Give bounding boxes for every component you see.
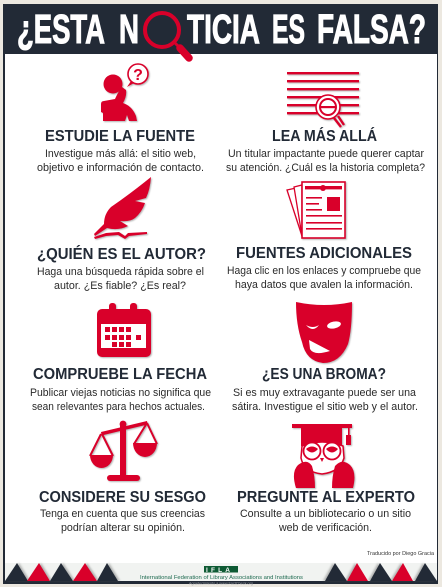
heading: PREGUNTE AL EXPERTO bbox=[237, 489, 415, 506]
title: ES bbox=[272, 6, 305, 52]
panel: pregunte al experto bbox=[237, 424, 415, 534]
body text: web de verificación. bbox=[278, 522, 372, 534]
body text: podrían alterar su opinión. bbox=[61, 522, 185, 534]
title: N bbox=[119, 6, 139, 52]
IFLA logo bbox=[204, 566, 238, 574]
heading: ESTUDIE LA FUENTE bbox=[45, 128, 195, 145]
body text bbox=[240, 508, 411, 534]
organisation name: International Federation of Library Associations and Institutions bbox=[140, 575, 303, 581]
body text: sean relevantes para hechos actuales. bbox=[32, 401, 205, 413]
body text: Si es muy extravagante puede ser una bbox=[233, 387, 417, 399]
icon: calendar bbox=[97, 303, 151, 357]
footer band bbox=[5, 563, 437, 581]
left triangles bbox=[5, 563, 118, 581]
translator credit: Traducido por Diego Gracia bbox=[367, 551, 435, 557]
icon: newspaper pages bbox=[287, 182, 345, 238]
body text bbox=[37, 148, 204, 174]
body text: Publicar viejas noticias no significa que bbox=[30, 387, 211, 399]
icon: balance scales bbox=[90, 421, 157, 481]
panel: compruebe la fecha bbox=[30, 303, 211, 413]
body text: Haga una búsqueda rápida sobre el bbox=[37, 266, 204, 278]
body text bbox=[40, 508, 205, 534]
panel: fuentes adicionales bbox=[227, 182, 421, 291]
body text: Un titular impactante puede querer captar bbox=[228, 148, 424, 160]
title: ¿ESTA bbox=[17, 6, 105, 52]
title: TICIA bbox=[187, 6, 260, 52]
body text bbox=[226, 148, 425, 174]
icon: winking mask bbox=[296, 302, 352, 363]
icon: lines with magnifier bbox=[287, 72, 359, 127]
icon: title magnifier bbox=[145, 13, 189, 58]
body text bbox=[30, 387, 211, 413]
panel: lea más allá bbox=[226, 72, 425, 174]
body text: autor. ¿Es fiable? ¿Es real? bbox=[54, 280, 186, 292]
body text: su atención. ¿Cuál es la historia completa? bbox=[226, 162, 425, 174]
IFLA logo: IFLA bbox=[206, 567, 230, 574]
icon: person with question: ? bbox=[133, 67, 143, 84]
body text: objetivo e información de contacto. bbox=[37, 162, 204, 174]
footer small acknowledgement: Agradecimiento a www.FactCheck.org bbox=[189, 580, 253, 586]
icon: person with question bbox=[101, 64, 148, 121]
panel: quién es el autor bbox=[37, 177, 206, 292]
right triangles bbox=[325, 563, 437, 581]
icon: owl with graduation cap bbox=[292, 424, 354, 488]
body text bbox=[232, 387, 418, 413]
body text bbox=[227, 265, 421, 291]
icon: quill bbox=[94, 177, 151, 239]
heading: LEA MÁS ALLÁ bbox=[272, 126, 377, 145]
heading: COMPRUEBE LA FECHA bbox=[33, 366, 207, 383]
panel: estudie la fuente bbox=[37, 64, 204, 174]
body text: Investigue más allá: el sitio web, bbox=[45, 148, 196, 160]
body text bbox=[37, 266, 204, 292]
body text: Consulte a un bibliotecario o un sitio bbox=[240, 508, 411, 520]
body text: Haga clic en los enlaces y compruebe que bbox=[227, 265, 421, 277]
body text: Tenga en cuenta que sus creencias bbox=[40, 508, 205, 520]
heading: FUENTES ADICIONALES bbox=[236, 245, 412, 262]
heading: ¿QUIÉN ES EL AUTOR? bbox=[37, 244, 206, 263]
heading: ¿ES UNA BROMA? bbox=[262, 366, 386, 383]
body text: haya datos que avalen la información. bbox=[235, 279, 413, 291]
heading: CONSIDERE SU SESGO bbox=[39, 489, 206, 506]
panel: considere su sesgo bbox=[39, 421, 206, 534]
panel: es una broma bbox=[232, 302, 418, 413]
body text: sátira. Investigue el sitio web y el autor. bbox=[232, 401, 418, 413]
title bbox=[17, 6, 426, 58]
